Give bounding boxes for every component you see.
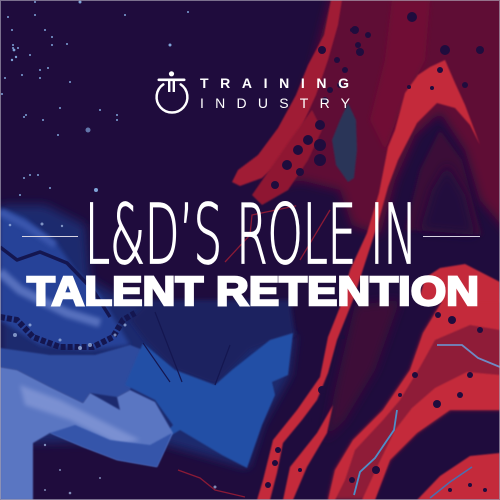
logo	[157, 71, 351, 113]
logo wordmark line 2: INDUSTRY	[200, 95, 351, 111]
right rule	[423, 236, 480, 237]
background: blue rock streak	[332, 103, 357, 182]
heading: TALENT RETENTION: TALENT RETENTION	[27, 268, 479, 314]
background: red marble	[170, 0, 500, 500]
background: blue marble	[0, 205, 295, 500]
left rule	[22, 236, 78, 237]
logo wordmark line 1: TRAINING	[200, 75, 349, 91]
icon: training figure in power ring	[157, 71, 187, 113]
